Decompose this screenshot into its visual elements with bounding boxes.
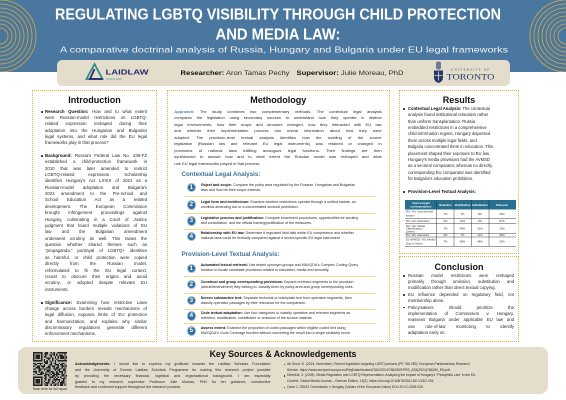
conclusion bullet list: EU influence depended on regulatory field, not: [408, 292, 514, 297]
results table: Omission: [496, 203, 508, 207]
step list: contextual legal analysis: Relationship with EU law: Determine if regulated field falls within EU competence and whether: [201, 231, 354, 235]
conclusion bullet list: [408, 273, 514, 335]
conclusion bullet list: implementation of Commission v. Hungary,: [408, 311, 514, 316]
step list: provision-level textual analysis: classify operative passages by their relevance for the comparison.: [201, 301, 306, 305]
header band with concentric arcs and title: [0, 0, 566, 72]
panel: conclusion: [399, 256, 519, 342]
intro: significance: Significance: Examining how restrictive Laws: [45, 300, 147, 304]
results: contextual legal analysis text: than uniform transplantation. Russia: [408, 119, 475, 124]
results table: RU / HU: Summit-level: [406, 210, 433, 214]
step list: contextual legal analysis: [184, 183, 376, 241]
intro: background: development. The European Commission: [45, 204, 147, 209]
step list: provision-level textual analysis: Code textual adaptation: Use four categories to classify operative and relevant segments as: [201, 311, 350, 315]
conclusion bullet list: primarily through omission, substitution and: [408, 279, 514, 284]
results: contextual legal analysis text: Contextual Legal Analysis: The contextual: [408, 106, 490, 111]
results table: 7%: [443, 226, 448, 230]
provision step 5: 5: [190, 327, 193, 334]
methodology approach text: [174, 108, 382, 166]
results table: RU / BU: Education: [406, 233, 430, 237]
step list: contextual legal analysis: laws and how far their scope extends.: [201, 188, 261, 192]
bullet markers: introduction: [41, 111, 43, 304]
step list: contextual legal analysis: national laws could be textually compared against a sector-specific EU legal instrument.: [201, 236, 341, 240]
results table: 44%: [499, 212, 505, 216]
intro: research question: adoptation into the Hungarian and Bulgarian: [45, 128, 147, 133]
intro: research question: frameworks play in that process?: [45, 140, 108, 145]
methodology approach text: compares the legislation using secondary sources to understand how they operate in distinct: [174, 115, 382, 120]
acknowledgements text: feedback and continued support throughout the research process.: [75, 385, 181, 389]
results table: 2%: [478, 219, 483, 223]
methodology approach text: legislation (Russian law and relevant EU legal instruments) was retained or changed in: [174, 141, 382, 146]
results table: 7%: [460, 212, 465, 216]
results table: 28%: [460, 240, 466, 244]
results table: 31%: [477, 226, 483, 230]
results table: 11%: [477, 233, 483, 237]
step list: provision-level textual analysis: Construct and group corresponding provisions: Expand retrieved segments to the provision: [201, 280, 354, 284]
intro: background: established a child-protection framework in: [45, 159, 147, 164]
acknowledgements text: and the University of Toronto Laidlaw Scholars Programme for making this research project possible: [75, 368, 270, 372]
results table: [405, 200, 516, 247]
acknowledgements text: Acknowledgements: I would like to express my gratitude towards the Laidlaw Scholars Foundation: [75, 362, 270, 366]
intro: background: as harmful, or child protection were copied: [45, 255, 147, 260]
methodology approach text: adopted. The provision-level textual analysis identifies how the wording of the source: [174, 134, 382, 140]
intro: background: Background: Russia's Federal Law No. 436-FZ: [45, 153, 147, 158]
methodology approach text: legal environments, how their scope and structure changed, how they interacted with EU law: [174, 122, 382, 126]
intro: background: recast to obscure their origins and avoid: [45, 274, 147, 279]
context step 4: 4: [190, 233, 193, 240]
results table: Classification /: [406, 227, 424, 231]
results: contextual legal analysis text: [408, 106, 493, 181]
researcher and logo bar: UNIVERSITY OF: [450, 67, 489, 71]
step list: contextual legal analysis: Object and scope: Compare the policy area regulated by the Russian, Hungarian and Bulgarian: [201, 183, 355, 187]
bullet markers: key sources: [284, 364, 285, 388]
intro: significance: change across borders reveals mechanisms of: [45, 306, 147, 311]
intro: background: identifies Hungary's Act LXXIX of 2021 as a: [45, 178, 147, 183]
context step 2: 2: [190, 201, 193, 208]
intro: background: directly from the Russian model,: [45, 261, 147, 266]
context step 4: [187, 232, 196, 241]
context step 2: [187, 200, 196, 210]
results: contextual legal analysis text: them across multiple legal fields, and: [408, 138, 477, 143]
results table: 0%: [443, 219, 448, 223]
intro: background: 2010 that was later amended to restrict: [45, 166, 147, 171]
provision step 4: 4: [190, 312, 193, 319]
provision step 3: 3: [190, 297, 193, 304]
key sources list: Service. https://www.europarl.europa.eu/RegData/etudes/ATAG/2024/766250/EPRS_ATA(2024)766250_EN.pdf: [287, 368, 450, 372]
panel: key sources and acknowledgements: [18, 347, 548, 394]
results table: 16%: [460, 219, 466, 223]
conclusion bullet list: adaptation early on.: [408, 330, 446, 335]
researcher and logo bar: Supervisor: Julie Moreau, PhD: [296, 70, 404, 76]
intro: background: judgment that found multiple violations of EU: [45, 223, 147, 228]
results: contextual legal analysis text: placement shaped their exposure to EU law.: [408, 151, 490, 156]
results: contextual legal analysis text: embedded restrictions in a comprehensive: [408, 125, 487, 130]
intro: significance: discriminatory regulations generate different: [45, 325, 147, 330]
intro: background: question whether shared themes such as: [45, 242, 147, 247]
acknowledgements text: [75, 362, 270, 389]
intro: research question: [45, 108, 147, 145]
results table: 49%: [460, 226, 466, 230]
context step 1: 1: [190, 184, 193, 191]
intro: background: brought infringement proceedings against: [45, 210, 147, 215]
results: provision-level heading: Provision-Level Textual Analysis:: [408, 189, 476, 194]
bullet markers: results: [403, 108, 405, 193]
step list: provision-level textual analysis: Automated lexical retrieval: Use tested synonym groups and MAXQDA's Complex Coding Query: [201, 263, 358, 267]
bullet markers: conclusion: [403, 275, 405, 308]
intro: background: "propaganda," portrayal of LGBTQ+ identities: [45, 248, 147, 253]
results table: 8%: [478, 212, 483, 216]
QR caption: Scan here for full report: [33, 387, 67, 391]
results: contextual legal analysis text: Bulgaria concentrated them in education. This: [408, 144, 493, 149]
researcher and logo bar: [56, 60, 510, 86]
step list: provision-level textual analysis: [184, 263, 376, 336]
acknowledgements text: by providing the necessary financial, logistical and organizational background. I am especially: [75, 374, 270, 378]
results: contextual legal analysis text: child-information regime, Hungary dispersed: [408, 131, 490, 136]
header band with concentric arcs and title: REGULATING LGBTQ VISIBILITY THROUGH CHILD PROTECTION: [55, 6, 501, 24]
acknowledgements text: grateful to my research supervisor Professor Julie Moreau, PhD for her guidance, constructive: [75, 380, 270, 384]
provision step 1: [187, 264, 196, 273]
methodology approach text: Approach: The study combines two complementary methods. The contextual legal analysis: [174, 108, 382, 114]
results: contextual legal analysis text: analysis found institutional relocation rather: [408, 112, 488, 117]
results table: 7%: [460, 233, 465, 237]
step list: contextual legal analysis: Legislative process and justification: Compare enactment procedures, opportunities for scrutiny: [201, 216, 358, 220]
results table: Duty to Inform: [406, 242, 424, 246]
step list: provision-level textual analysis: retention, modification, substitution or omission of the source material.: [201, 316, 312, 320]
results table: correspondence: [411, 204, 432, 208]
intro: background: [44, 153, 148, 292]
results table: 30%: [499, 233, 505, 237]
results table: Substitution: [472, 203, 488, 207]
intro: significance: [45, 300, 147, 336]
panel: introduction: [32, 90, 157, 342]
intro: background: instruments.: [45, 287, 69, 292]
provision step 2: 2: [190, 281, 193, 288]
intro: background: scrutiny, or adopted despite relevant EU: [45, 280, 147, 285]
intro: research question: legal systems, and what role did the EU legal: [45, 134, 147, 139]
provision step 4: [187, 311, 196, 321]
researcher and logo bar: LAIDLAW: [105, 67, 148, 76]
step list: provision-level textual analysis: function to locate candidate provisions related to education, media and sexuality.: [201, 268, 329, 272]
heading: conclusion: Conclusion: [434, 262, 484, 272]
provision step 3: [187, 296, 196, 305]
methodology approach text: role EU legal frameworks played in that process.: [174, 160, 260, 166]
intro: background: Russian-model adoptation and Bulgaria's: [45, 185, 147, 190]
intro: significance: enforcement mechanisms.: [45, 331, 96, 336]
conclusion bullet list: reassess Bulgaria under applicable EU law and: [408, 317, 514, 322]
results table: 0%: [443, 233, 448, 237]
intro: background: LGBTQ-related expression. Scholarship: [45, 172, 147, 177]
context step 3: 3: [190, 217, 193, 224]
intro: research question: were Russian-model restrictions on LGBTQ-: [45, 115, 147, 120]
context step 1: [187, 183, 196, 192]
step list: contextual legal analysis: omnibus amending Act or a concentrated sectoral prohibition.: [201, 205, 299, 209]
panel: methodology: [167, 90, 390, 342]
conclusion bullet list: membership alone.: [408, 298, 445, 303]
intro: background: 2024 amendment to the Pre-school and: [45, 191, 147, 196]
results table: section: [406, 214, 415, 218]
step list: provision-level textual analysis: Screen substantive text: Separate technical or boilerplate text from operative segments, then: [201, 296, 352, 300]
results table: 7%: [443, 212, 448, 216]
key sources list: Case C-769/22 Commission v Hungary (Values of the European Union) ECLI:EU:C:2026:326.: [287, 385, 424, 389]
step list: contextual legal analysis: Legal form and architecture: Examine whether restrictions operate through a unified statute, an: [201, 200, 356, 204]
context step 3: [187, 216, 196, 226]
results table: Source-target: [412, 201, 430, 205]
conclusion bullet list: Russian model restrictions were reshaped: [408, 273, 514, 278]
intro: background: law and the Bulgarian amendment: [45, 229, 147, 234]
intro: research question: Research Question: How and to what extent: [45, 108, 147, 114]
researcher and logo bar: TORONTO: [446, 72, 494, 81]
heading: methodology: Methodology: [250, 95, 306, 105]
results table: 13%: [499, 226, 505, 230]
results table: RU / HU: Media: [406, 224, 425, 228]
conclusion bullet list: modification rather than direct textual copying.: [408, 285, 496, 290]
intro: research question: related expression reshaped during their: [45, 121, 147, 126]
key sources list: [287, 362, 476, 389]
subheading: contextual legal analysis: Contextual Legal Analysis:: [182, 170, 260, 178]
results table: Listeria: [406, 230, 415, 234]
heading: results: Results: [443, 94, 475, 104]
step list: provision-level textual analysis: Assess extent: Examine the proportion of coded passages within eligible coded text using: [201, 326, 346, 330]
results table: 7%: [443, 240, 448, 244]
intro: background: reformulated to fit the EU legal context,: [45, 268, 147, 273]
intro: background: Hungary, culminating in a Court of Justice: [45, 217, 147, 222]
researcher and logo bar: Researcher: Aron Tamas Pechy: [180, 70, 289, 76]
conclusion bullet list: Policymakers should prioritize the: [408, 305, 514, 310]
conclusion bullet list: use rule-of-law monitoring to identify: [408, 324, 514, 329]
results table: Modification: [455, 203, 471, 207]
results: contextual legal analysis text: Hungary's media provisions had the AVMSD: [408, 157, 490, 162]
subheading: provision-level textual analysis: Provision-Level Textual Analysis:: [182, 251, 280, 258]
results table: 46%: [477, 240, 483, 244]
results table: 33%: [499, 240, 505, 244]
provision step 1: 1: [190, 265, 193, 272]
results: contextual legal analysis text: for Bulgaria's education prohibition.: [408, 176, 473, 181]
intro: background: School Education Act as a related: [45, 197, 147, 202]
QR code: [33, 352, 67, 386]
methodology approach text: synthesized to answer how and to what extent the Russian model was reshaped and what: [174, 154, 382, 159]
step list: contextual legal analysis: and consultation, and the official framing/justification of the measures.: [201, 221, 312, 225]
header band with concentric arcs and title: A comparative doctrinal analysis of Russia, Hungary and Bulgaria under EU legal frameworks: [60, 44, 508, 54]
methodology approach text: and whether their implementation process can reveal information about how they were: [174, 128, 382, 133]
results table: Retention: [439, 203, 452, 207]
results table: 87%: [499, 219, 505, 223]
intro: significance: and harmonization, and explains why similar: [45, 319, 147, 324]
key sources list: de Groot, D. (2024, November). Recent legislation targeting LGBTI persons (PE 766.250). European Parliamentary Research: [287, 362, 470, 366]
results table: EU AVMSD / HU: Media /: [406, 238, 436, 242]
methodology approach text: provisions of national laws fulfilling analogous legal functions. Their findings are then: [174, 148, 382, 152]
panel: results: [399, 90, 519, 254]
header band with concentric arcs and title: AND MEDIA LAW:: [216, 26, 340, 44]
results table: RU / HU: Education: [406, 219, 430, 223]
step list: provision-level textual analysis: MAXQDA's Code Coverage function without converting the result into a single similarity score.: [201, 331, 351, 335]
heading: key sources and acknowledgements: Key Sources & Acknowledgements: [210, 349, 356, 359]
provision step 5: [187, 326, 196, 336]
provision step 2: [187, 280, 196, 289]
key sources list: Context. Global Media Journal – German Edition, 15(2). https://doi.org/10.60678/GMJ-DE.V15I2.294: [287, 379, 433, 383]
results: contextual legal analysis text: corresponding EU comparator was identified: [408, 170, 490, 175]
intro: significance: legal diffusion, exposes limits of EU protection: [45, 312, 147, 317]
step list: provision-level textual analysis: (article/amendment) they belong to, classify them by policy area and group corresponding ones.: [201, 285, 354, 289]
researcher and logo bar: SCHOLARS: [106, 76, 121, 80]
heading: introduction: Introduction: [68, 95, 121, 105]
intro: background: underwent scrutiny as well. This raises the: [45, 236, 147, 241]
key sources list: Detrekői, Z. (2025). Media Regulation and LGBTQ Representation: Analyzing the Impact of Hungary's "Pedophilia Law" in the EU: [287, 373, 475, 377]
results: contextual legal analysis text: as a sectoral comparator, whereas no directly: [408, 163, 492, 168]
